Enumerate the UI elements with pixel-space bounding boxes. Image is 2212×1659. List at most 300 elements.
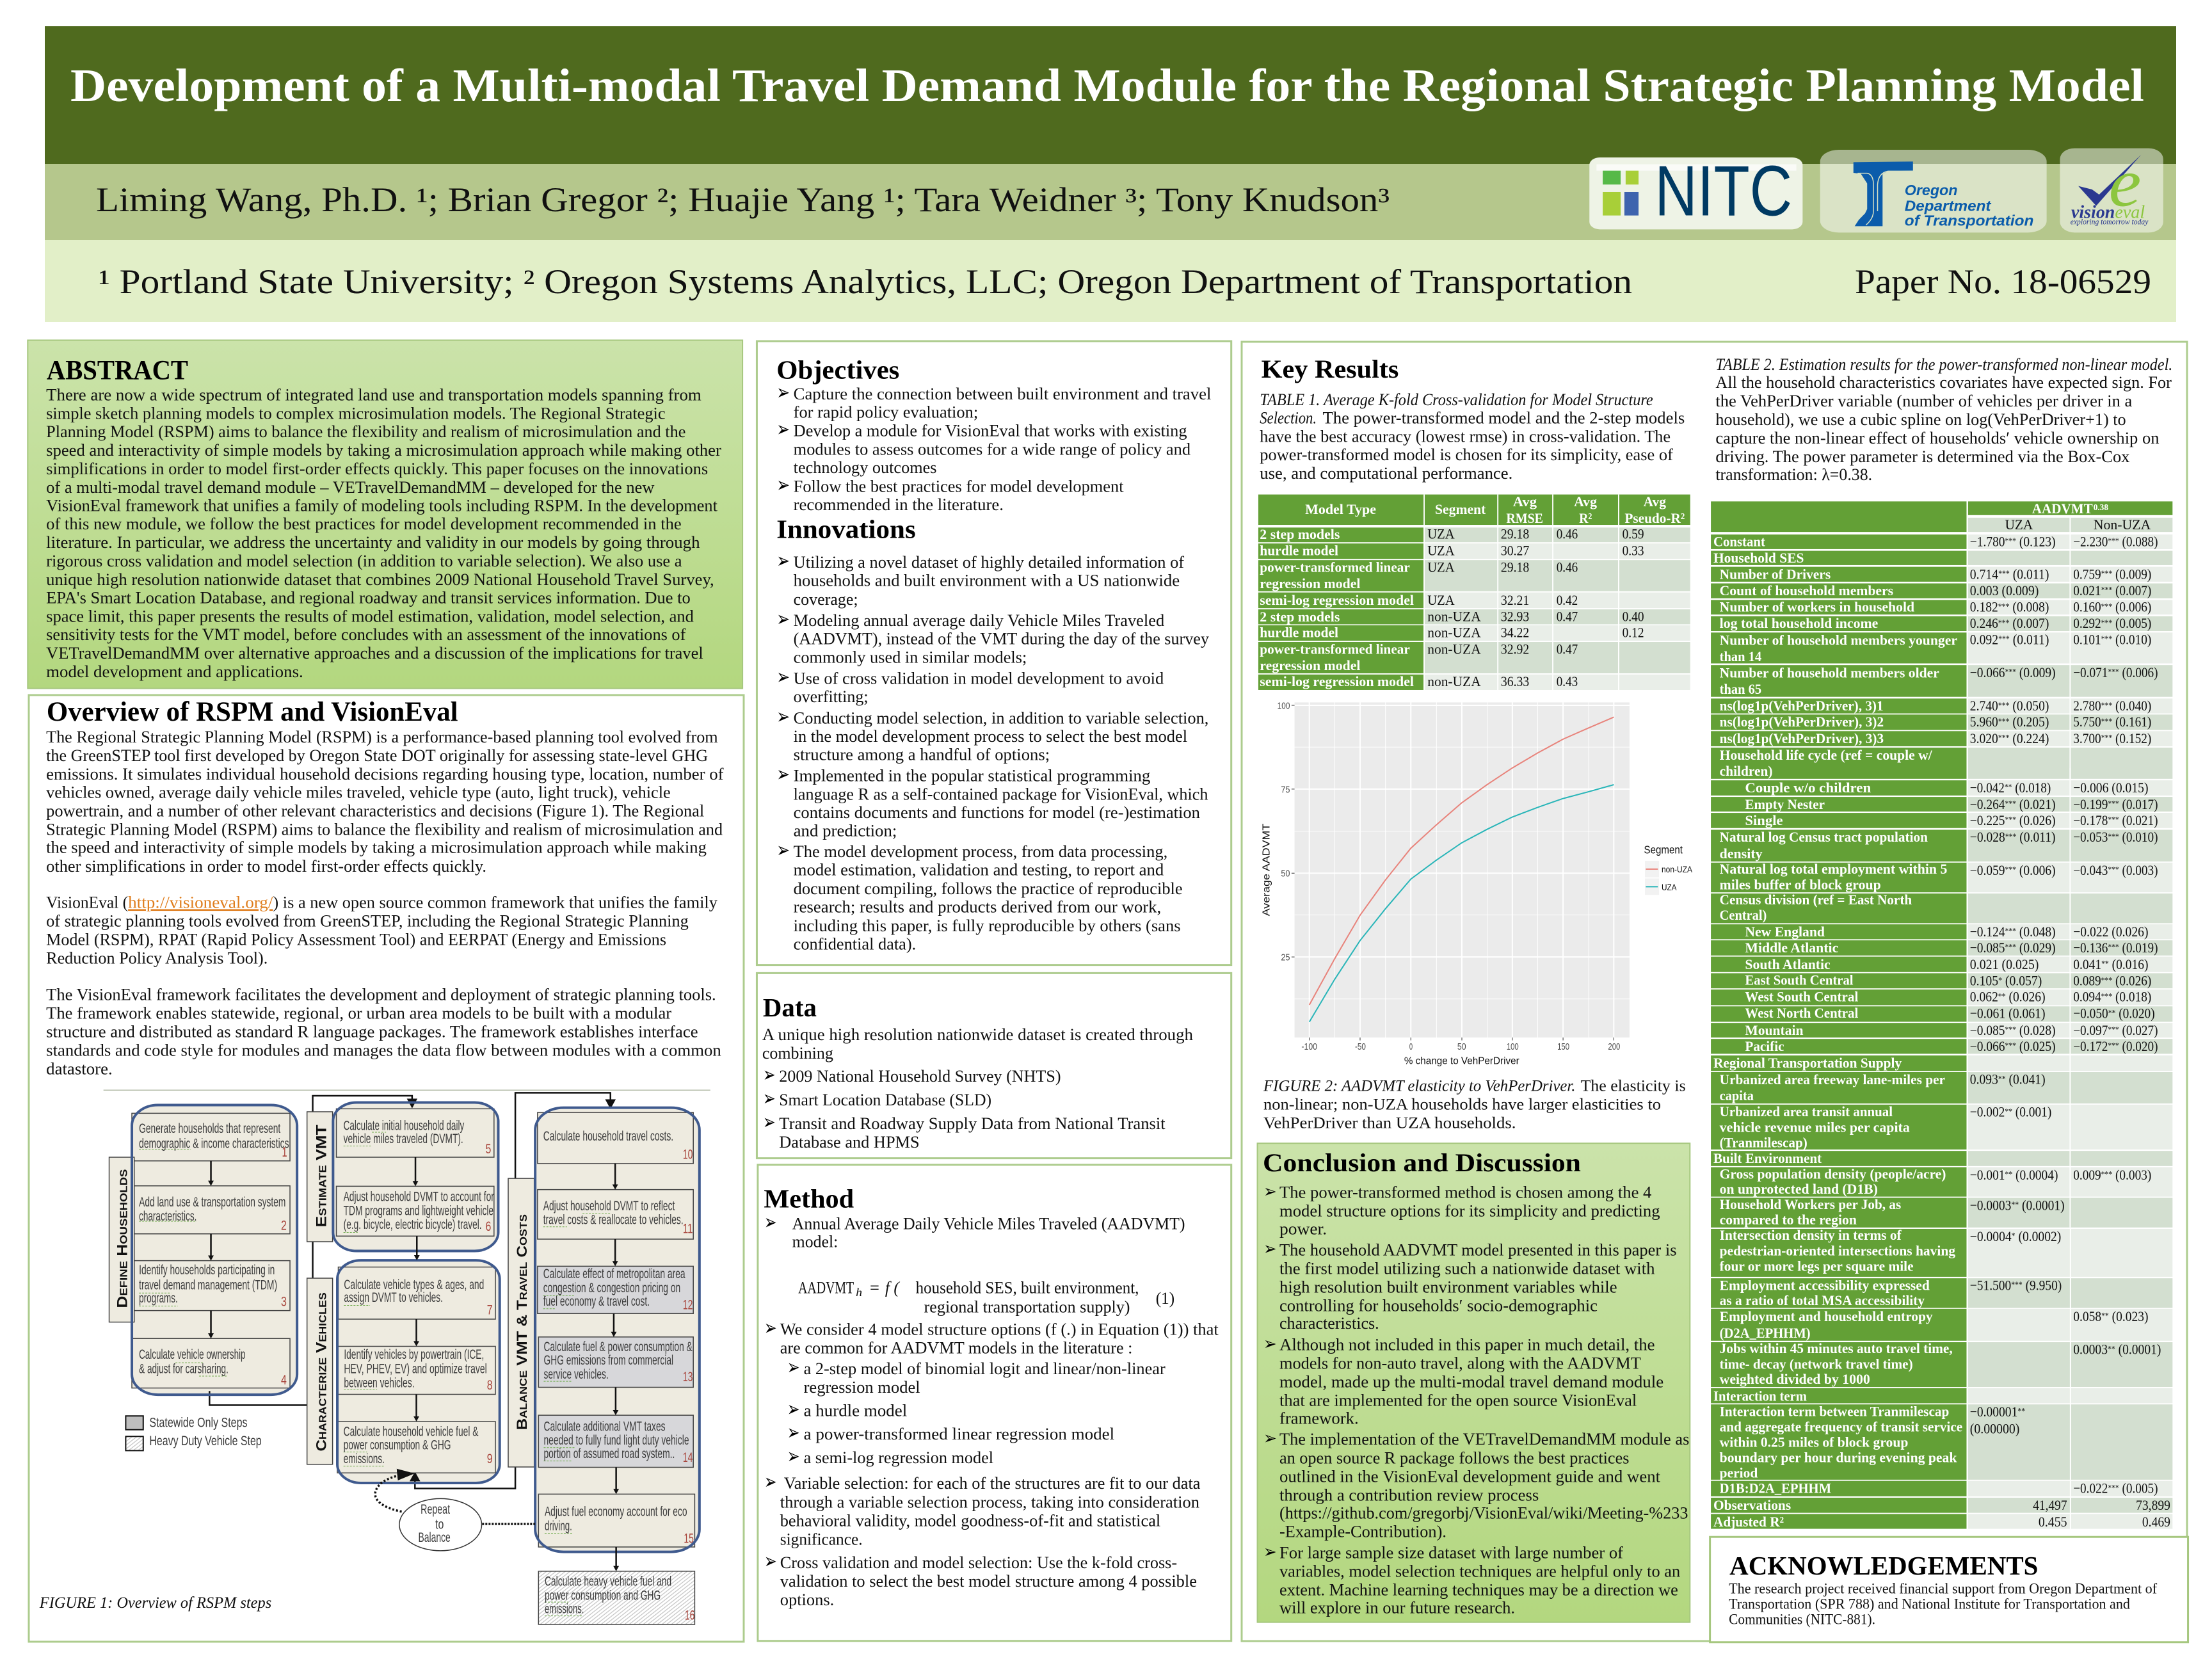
data text: combining <box>762 1044 833 1062</box>
equation 1 <box>798 1278 1174 1316</box>
coefficient values <box>1970 1228 2170 1530</box>
flowchart step text: Add land use & transportation system <box>139 1194 285 1210</box>
y axis labels <box>1261 701 1290 963</box>
flowchart step text: service vehicles. <box>543 1367 609 1382</box>
abstract text: There are now a wide spectrum of integrated land use and transportation models spanning from <box>46 385 701 405</box>
panel: abstract <box>28 340 742 689</box>
coefficient values: 0.092*** (0.011) <box>1970 632 2049 648</box>
conclusion list <box>1263 1182 1689 1617</box>
coefficient values: 0.101*** (0.010) <box>2073 632 2151 648</box>
innovations list: language R as a self-contained package for VisionEval, which <box>794 785 1208 804</box>
innovations list: Implemented in the popular statistical programming <box>794 767 1151 785</box>
row labels: Interaction term <box>1713 1388 1807 1404</box>
coefficient values: −1.780*** (0.123) <box>1970 534 2056 550</box>
innovations list: coverage; <box>794 590 858 609</box>
row labels: Urbanized area transit annual <box>1720 1104 1893 1120</box>
innovations list: The model development process, from data processing, <box>794 843 1167 862</box>
row labels: Number of household members younger <box>1720 632 1957 648</box>
flowchart step numbers: 14 <box>683 1450 693 1465</box>
flowchart step text <box>139 1118 693 1617</box>
flowchart step text: Calculate initial household daily <box>344 1118 465 1134</box>
row labels: weighted divided by 1000 <box>1720 1371 1870 1387</box>
table 1 values: non-UZA <box>1427 609 1481 625</box>
row labels: Observations <box>1713 1497 1791 1513</box>
method intro: ➢ <box>764 1210 777 1234</box>
table 2 caption <box>1715 355 2172 484</box>
method list: options. <box>780 1591 834 1609</box>
flowchart step text: Calculate heavy vehicle fuel and <box>545 1574 671 1589</box>
coefficient values: −0.124*** (0.048) <box>1970 924 2056 940</box>
table 1 values: 34.22 <box>1501 625 1529 641</box>
title: Development of a Multi-modal Travel Demand Module for the Regional Strategic Planning Model <box>70 60 2144 111</box>
row labels: on unprotected land (D1B) <box>1720 1182 1878 1198</box>
flowchart step text: HEV, PHEV, EV) and optimize travel <box>344 1361 487 1377</box>
innovations list: model estimation, validation and testing, to report and <box>794 861 1164 879</box>
x axis labels: 50 <box>1457 1042 1466 1052</box>
x axis labels <box>1301 1042 1620 1066</box>
heading: innovations: Innovations <box>776 515 916 544</box>
coefficient values: 0.714*** (0.011) <box>1970 566 2049 582</box>
overview paragraph 2: VisionEval ( <box>46 893 128 912</box>
equation 1: household SES, built environment, <box>916 1278 1139 1297</box>
table 1 values: 32.92 <box>1501 642 1529 657</box>
coefficient values: 0.759*** (0.009) <box>2073 566 2151 582</box>
panel: overview of RSPM and VisionEval <box>29 695 744 1642</box>
chart legend <box>1644 844 1693 895</box>
row labels: Household Workers per Job, as <box>1720 1197 1901 1213</box>
coefficient values: 0.0003** (0.0001) <box>2073 1341 2161 1358</box>
objectives list: technology outcomes <box>794 459 937 477</box>
overview paragraph 1: The Regional Strategic Planning Model (RSPM) is a performance-based planning tool evolved from <box>46 727 718 746</box>
overview paragraph 2: Model (RSPM), RPAT (Rapid Policy Assessment Tool) and EERPAT (Energy and Emissions <box>46 930 666 949</box>
row labels: West South Central <box>1745 990 1859 1005</box>
flowchart step numbers: 4 <box>281 1372 287 1388</box>
objectives list: Capture the connection between built environment and travel <box>794 385 1211 404</box>
row labels: compared to the region <box>1720 1212 1857 1228</box>
table 2 caption: household), we use a cubic spline on log(VehPerDriver+1) to <box>1715 410 2126 429</box>
panel: objectives and innovations <box>757 341 1231 965</box>
abstract text: space limit, this paper presents the results of model estimation, validation, model selection, and <box>46 607 694 626</box>
flowchart step numbers: 16 <box>685 1608 694 1623</box>
repeat to balance loop: to <box>435 1517 444 1532</box>
flowchart step numbers: 5 <box>486 1142 491 1157</box>
equation 1: (1) <box>1156 1289 1174 1308</box>
y axis labels: 75 <box>1281 785 1290 795</box>
heading: data: Data <box>763 993 817 1022</box>
objectives list <box>776 380 1211 515</box>
coefficient values <box>1970 534 2158 747</box>
table 2 caption: driving. The power parameter is determined via the Box-Cox <box>1715 447 2130 466</box>
conclusion list: through a contribution review process <box>1279 1487 1539 1505</box>
figure 2 caption: The elasticity is <box>1580 1077 1686 1094</box>
overview paragraph 1: emissions. It simulates individual household decisions regarding housing type, location, number of <box>46 765 724 783</box>
abstract text: VETravelDemandMM over alternative approaches and a discussion of the implications for travel <box>46 644 703 662</box>
data text: 2009 National Household Survey (NHTS) <box>779 1067 1061 1085</box>
coefficient values: 0.455 <box>2039 1514 2067 1530</box>
table 1 header: Avg <box>1574 494 1597 509</box>
conclusion list: model structure options for its simplicity and predicting <box>1279 1203 1660 1221</box>
conclusion list: ➢ <box>1263 1429 1277 1448</box>
row labels: Natural log total employment within 5 <box>1720 862 1947 878</box>
panel: conclusion and discussion <box>1258 1143 1690 1623</box>
coefficient values: −0.022 (0.026) <box>2073 924 2149 940</box>
method list: behavioral validity, model goodness-of-fit and statistical <box>780 1512 1160 1530</box>
affiliations: ¹ Portland State University; ² Oregon Systems Analytics, LLC; Oregon Department of Transportation <box>99 262 1632 301</box>
row labels: children) <box>1720 764 1773 780</box>
conclusion list: model, made up the multi-modal travel demand module <box>1279 1373 1663 1391</box>
equation 1: regional transportation supply) <box>924 1298 1130 1316</box>
flowchart step text: Adjust household DVMT to account for <box>344 1189 494 1205</box>
table 1 values: 0.43 <box>1557 675 1578 690</box>
authors: Liming Wang, Ph.D. ¹; Brian Gregor ²; Huajie Yang ¹; Tara Weidner ³; Tony Knudson³ <box>96 180 1390 219</box>
table 1 header: Avg <box>1513 494 1537 509</box>
method list: are common for AADVMT models in the literature : <box>780 1339 1132 1357</box>
flowchart step text: travel demand management (TDM) <box>139 1278 277 1293</box>
x axis labels: 0 <box>1409 1042 1413 1052</box>
overview paragraph 3 <box>46 985 721 1078</box>
table 1 caption: have the best accuracy (lowest rmse) in cross-validation. The <box>1260 428 1671 446</box>
conclusion list: framework. <box>1279 1409 1359 1428</box>
overview paragraph 2: of strategic planning tools evolved from GreenSTEP, including the Regional Strategic Planning <box>46 911 689 931</box>
flowchart step text: Calculate vehicle types & ages, and <box>344 1278 484 1292</box>
heading: abstract: ABSTRACT <box>47 355 188 386</box>
data text: A unique high resolution nationwide dataset is created through <box>762 1025 1194 1044</box>
row labels: (D2A_EPHHM) <box>1720 1324 1811 1341</box>
coefficient values: 41,497 <box>2033 1497 2067 1513</box>
flowchart step numbers: 2 <box>281 1218 287 1233</box>
section labels: Balance VMT & Travel Costs <box>515 1214 530 1430</box>
coefficient values: −0.022*** (0.005) <box>2073 1480 2158 1496</box>
table 1 row labels: semi-log regression model <box>1260 675 1414 690</box>
heading: method: Method <box>764 1184 854 1214</box>
table 1 values: 0.46 <box>1557 527 1578 542</box>
table 1 row labels: regression model <box>1260 658 1361 673</box>
row labels: than 14 <box>1720 649 1761 665</box>
coefficient values: 5.750*** (0.161) <box>2073 714 2151 730</box>
table 1 row labels: hurdle model <box>1260 543 1338 559</box>
row labels: Middle Atlantic <box>1745 940 1838 956</box>
coefficient values: 3.700*** (0.152) <box>2073 731 2151 747</box>
heading: objectives: Objectives <box>776 355 899 385</box>
table 1 caption: power-transformed model is chosen for its simplicity, ease of <box>1260 446 1673 464</box>
coefficient values: 0.182*** (0.008) <box>1970 600 2049 615</box>
table 1 header: Model Type <box>1305 502 1376 518</box>
flowchart step text: Adjust household DVMT to reflect <box>543 1199 675 1214</box>
conclusion list: ➢ <box>1263 1182 1277 1202</box>
table 2 caption: transformation: λ=0.38. <box>1715 465 1872 484</box>
chart legend: UZA <box>1662 882 1677 892</box>
overview paragraph 1 <box>46 727 724 876</box>
row labels: than 65 <box>1720 682 1761 698</box>
abstract text: of a multi-modal travel demand module – VETravelDemandMM – developed for the new <box>46 478 655 497</box>
innovations list: ➢ <box>776 664 790 689</box>
table 1 values: 0.47 <box>1557 609 1578 625</box>
row labels: vehicle revenue miles per capita <box>1720 1119 1910 1135</box>
row labels: period <box>1720 1464 1758 1481</box>
abstract text: of this new module, we follow the best practices for model development recommended in the <box>46 514 682 533</box>
section labels <box>115 1125 530 1452</box>
x axis labels: -100 <box>1301 1042 1317 1052</box>
table 1 row labels: power-transformed linear <box>1260 642 1410 657</box>
logo: VisionEval: vision <box>2071 202 2115 222</box>
table 1 values: 0.59 <box>1623 527 1644 542</box>
flowchart step numbers: 15 <box>684 1531 694 1546</box>
conclusion list: The implementation of the VETravelDemandMM module as <box>1279 1431 1689 1448</box>
table 1 caption: use, and computational performance. <box>1260 465 1512 483</box>
flowchart step text: portion of assumed road system.. <box>543 1447 675 1461</box>
method intro: Annual Average Daily Vehicle Miles Traveled (AADVMT) <box>792 1215 1185 1233</box>
overview paragraph 3: The VisionEval framework facilitates the development and deployment of strategic planning tools. <box>46 985 716 1004</box>
coefficient values: −0.053*** (0.010) <box>2073 830 2158 846</box>
row labels: capita <box>1720 1088 1754 1104</box>
logo: VisionEval: e <box>2109 145 2141 221</box>
data text: Smart Location Database (SLD) <box>779 1091 991 1109</box>
coefficient values: −0.028*** (0.011) <box>1970 830 2056 846</box>
coefficient values: 0.021*** (0.007) <box>2073 583 2151 599</box>
overview paragraph 1: vehicles owned, average daily vehicle miles traveled, vehicle type (auto, light truck), vehicle <box>46 783 671 801</box>
coefficient values: −0.050** (0.020) <box>2073 1006 2155 1022</box>
innovations list: Modeling annual average daily Vehicle Miles Traveled <box>794 612 1165 630</box>
table 1 values: 0.40 <box>1623 609 1644 625</box>
flowchart step text: assign DVMT to vehicles. <box>344 1290 443 1306</box>
row labels: Mountain <box>1745 1023 1804 1039</box>
abstract text: Planning Model (RSPM) aims to balance the flexibility and realism of microsimulation and the <box>46 422 685 441</box>
overview paragraph 2: http://visioneval.org/ <box>128 893 273 912</box>
coefficient values: 0.062** (0.026) <box>1970 990 2046 1005</box>
innovations list: document compiling, follows the practice of reproducible <box>794 880 1183 899</box>
flowchart step text: emissions. <box>545 1601 584 1617</box>
flowchart step text: Calculate effect of metropolitan area <box>543 1267 685 1281</box>
objectives list: Develop a module for VisionEval that works with existing <box>794 422 1187 440</box>
line: UZA <box>1310 785 1614 1022</box>
table 2 middle section <box>1711 768 2172 1228</box>
section labels: Characterize Vehicles <box>314 1292 330 1452</box>
table 1 values: 29.18 <box>1501 527 1529 542</box>
equation 1: h <box>856 1286 862 1299</box>
method list: ➢ <box>764 1470 777 1494</box>
row labels: Urbanized area freeway lane-miles per <box>1720 1072 1945 1088</box>
row labels: Central) <box>1720 908 1767 924</box>
section labels: Estimate VMT <box>314 1125 330 1227</box>
flowchart step text: congestion & congestion pricing on <box>543 1281 680 1295</box>
heading: acknowledgements: ACKNOWLEDGEMENTS <box>1729 1551 2038 1581</box>
table 1 values: UZA <box>1427 560 1455 575</box>
flowchart step text: programs. <box>139 1290 178 1306</box>
overview paragraph 2: ) is a new open source common framework that unifies the family <box>273 893 717 912</box>
table 1 row labels: semi-log regression model <box>1260 593 1414 608</box>
table 2 header: Non-UZA <box>2094 517 2151 533</box>
method list: Variable selection: for each of the structures are fit to our data <box>784 1474 1200 1493</box>
overview paragraph 1: other simplifications in order to model first-order effects quickly. <box>46 856 486 876</box>
row labels: Number of workers in household <box>1720 600 1914 615</box>
overview paragraph 2: Reduction Policy Analysis Tool). <box>46 949 268 968</box>
flowchart step numbers: 3 <box>281 1294 287 1310</box>
flowchart step text: demographic & income characteristics <box>139 1136 289 1151</box>
innovations list: including this paper, is fully reproducible by others (sans <box>794 917 1181 936</box>
table 1 with caption <box>1258 355 1690 690</box>
row labels: South Atlantic <box>1745 957 1831 973</box>
table 1 row labels: power-transformed linear <box>1260 560 1410 575</box>
flowchart step text: Calculate additional VMT taxes <box>543 1419 666 1434</box>
logo: Oregon Department of Transportation: Oregon <box>1905 182 1957 198</box>
flowchart step numbers: 10 <box>683 1147 693 1162</box>
coefficient values: 3.020*** (0.224) <box>1970 731 2049 747</box>
flowchart step text: Calculate vehicle ownership <box>139 1347 246 1363</box>
overview paragraph 2 <box>46 893 717 968</box>
method list: validation to select the best model structure among 4 possible <box>780 1572 1197 1591</box>
coefficient values: −0.002** (0.001) <box>1970 1104 2051 1120</box>
data text: ➢ <box>763 1110 776 1134</box>
overview paragraph 3: structure and distributed as standard R language packages. The framework establishes interface <box>46 1022 698 1041</box>
method list: ➢ <box>787 1420 799 1445</box>
coefficient values: 2.780*** (0.040) <box>2073 698 2151 714</box>
table 1 values: 0.47 <box>1557 642 1578 657</box>
text: NITC <box>1655 150 1792 231</box>
row labels: density <box>1720 846 1763 862</box>
table 1 header: R² <box>1579 511 1592 526</box>
objectives list: ➢ <box>776 472 790 497</box>
row labels: Interaction term between Tranmilescap <box>1720 1403 1949 1419</box>
method list: ➢ <box>764 1316 777 1340</box>
overview paragraph 1: powertrain, and a number of other relevant characteristics and decisions (Figure 1). The Regional <box>46 801 704 820</box>
row labels: within 0.25 miles of block group <box>1720 1434 1908 1450</box>
data text: Transit and Roadway Supply Data from National Transit <box>779 1114 1166 1133</box>
method list: regression model <box>804 1378 920 1397</box>
table 1 values: UZA <box>1427 527 1455 542</box>
coefficient values: −0.178*** (0.021) <box>2073 813 2158 829</box>
row labels: Household SES <box>1713 550 1804 566</box>
flowchart step text: travel costs & reallocate to vehicles. <box>543 1212 684 1228</box>
logo: NITC <box>1589 150 1802 231</box>
conclusion list: -Example-Contribution). <box>1279 1523 1447 1541</box>
coefficient values: −0.199*** (0.017) <box>2073 797 2158 813</box>
figure 1: RSPM flowchart <box>39 1090 710 1624</box>
flowchart step text: (e.g. bicycle, electric bicycle) travel. <box>344 1217 482 1232</box>
method intro <box>764 1210 1185 1251</box>
x axis labels: % change to VehPerDriver <box>1404 1055 1519 1066</box>
coefficient values: 0.094*** (0.018) <box>2073 990 2151 1005</box>
logo: VisionEval <box>2060 145 2163 232</box>
flowchart step numbers: 12 <box>683 1297 693 1313</box>
innovations list: and prediction; <box>794 822 897 840</box>
overview paragraph 3: standards and code style for modules and manages the data flow between modules with a common <box>46 1041 721 1060</box>
innovations list: (AADVMT), instead of the VMT during the day of the survey <box>794 630 1209 648</box>
row labels: miles buffer of block group <box>1720 877 1881 893</box>
flowchart step text: power consumption and GHG <box>545 1588 661 1603</box>
row labels: East South Central <box>1745 972 1854 988</box>
table 2 caption: All the household characteristics covariates have expected sign. For <box>1715 373 2172 392</box>
method list <box>764 1316 1219 1609</box>
table 1 row labels: regression model <box>1260 576 1361 591</box>
x axis labels: 100 <box>1507 1042 1519 1052</box>
coefficient values: 2.740*** (0.050) <box>1970 698 2049 714</box>
flowchart step text: characteristics. <box>139 1209 196 1224</box>
row labels: Count of household members <box>1720 583 1893 599</box>
overview paragraph 1: the GreenSTEP tool first developed by Oregon State DOT originally for assessing state-level GHG <box>46 746 708 765</box>
method list: significance. <box>780 1530 863 1548</box>
coefficient values: −0.066*** (0.025) <box>1970 1039 2056 1055</box>
row labels: boundary per hour during evening peak <box>1720 1449 1957 1465</box>
row labels: log total household income <box>1720 616 1878 632</box>
innovations list: contains documents and functions for model (re-)estimation <box>794 803 1200 822</box>
table 1 values: 32.93 <box>1501 609 1529 625</box>
method list: ➢ <box>787 1397 799 1421</box>
table 1 header <box>1305 494 1685 526</box>
conclusion list: ➢ <box>1263 1543 1277 1562</box>
innovations list: ➢ <box>776 549 790 573</box>
repeat to balance loop: Repeat <box>421 1502 450 1517</box>
innovations list: research; results and products derived from our work, <box>794 898 1161 917</box>
table 1 values: UZA <box>1427 593 1455 608</box>
coefficient values: 0.003 (0.009) <box>1970 583 2039 599</box>
row labels: Employment accessibility expressed <box>1720 1277 1930 1293</box>
row labels: Gross population density (people/acre) <box>1720 1166 1946 1182</box>
abstract text: sensitivity tests for the VMT model, before concludes with an assessment of the innovations of <box>46 625 686 644</box>
row labels: Adjusted R² <box>1713 1514 1784 1530</box>
table 2 bottom section <box>1711 1227 2172 1530</box>
row labels <box>1713 1227 1962 1530</box>
x axis labels: 150 <box>1557 1042 1569 1052</box>
heading: overview: Overview of RSPM and VisionEval <box>47 696 458 727</box>
coefficient values: −0.059*** (0.006) <box>1970 863 2056 879</box>
coefficient values: 0.469 <box>2142 1514 2170 1530</box>
conclusion list: The household AADVMT model presented in this paper is <box>1279 1241 1677 1260</box>
panel: method <box>758 1165 1231 1641</box>
data text <box>762 1025 1194 1151</box>
abstract text: literature. In particular, we address the uncertainty and validity in our models by going through <box>46 533 700 552</box>
acknowledgements text: Communities (NITC-881). <box>1729 1612 1875 1628</box>
table 1 values: 29.18 <box>1501 560 1529 575</box>
repeat to balance loop: Balance <box>418 1530 451 1545</box>
panel: acknowledgements <box>1710 1537 2188 1642</box>
overview text <box>46 696 724 1078</box>
overview paragraph 3: The framework enables statewide, regional, or urban area models to be built with a modular <box>46 1004 672 1023</box>
coefficient values: −0.136*** (0.019) <box>2073 940 2158 956</box>
coefficient values: −0.001** (0.0004) <box>1970 1167 2058 1183</box>
y axis labels: Average AADVMT <box>1261 823 1272 916</box>
conclusion list: that are implemented for the open source VisionEval <box>1279 1391 1637 1410</box>
method list: ➢ <box>764 1549 777 1573</box>
method list: ➢ <box>787 1355 799 1379</box>
abstract text: simple sketch planning models to complex microsimulation models. The Regional Strategic <box>46 404 666 423</box>
coefficient values: −0.085*** (0.029) <box>1970 940 2056 956</box>
table 1 values: 0.33 <box>1623 543 1644 559</box>
innovations list: Use of cross validation in model development to avoid <box>794 669 1164 688</box>
table 1 values: non-UZA <box>1427 625 1481 641</box>
coefficient values: −0.0004* (0.0002) <box>1970 1228 2061 1244</box>
row labels: four or more legs per square mile <box>1720 1258 1914 1274</box>
table 2 caption: capture the non-linear effect of households′ vehicle ownership on <box>1715 429 2160 447</box>
flowchart step text: GHG emissions from commercial <box>543 1353 673 1368</box>
table 2 header: UZA <box>2005 517 2033 533</box>
row labels: time- decay (network travel time) <box>1720 1356 1913 1372</box>
objectives list: ➢ <box>776 417 790 441</box>
row labels: Employment and household entropy <box>1720 1308 1933 1324</box>
method list: a power-transformed linear regression model <box>804 1425 1114 1443</box>
logo: VisionEval: eval <box>2115 202 2145 222</box>
y axis labels: 100 <box>1278 701 1290 711</box>
flowchart step text: & adjust for carsharing. <box>139 1361 228 1377</box>
coefficient values: −51.500*** (9.950) <box>1970 1277 2062 1293</box>
row labels: New England <box>1745 924 1825 940</box>
abstract text: unique high resolution nationwide dataset that combines 2009 National Household Travel Survey, <box>46 570 714 589</box>
innovations list: structure among a handful of options; <box>794 746 1050 764</box>
table 1 row labels <box>1260 527 1414 690</box>
method list: a hurdle model <box>804 1402 907 1420</box>
overview paragraph 1: the speed and interactivity of simple models by taking a microsimulation approach while making <box>46 838 707 857</box>
method intro: model: <box>792 1233 838 1251</box>
coefficient values: −0.061 (0.061) <box>1970 1006 2046 1022</box>
